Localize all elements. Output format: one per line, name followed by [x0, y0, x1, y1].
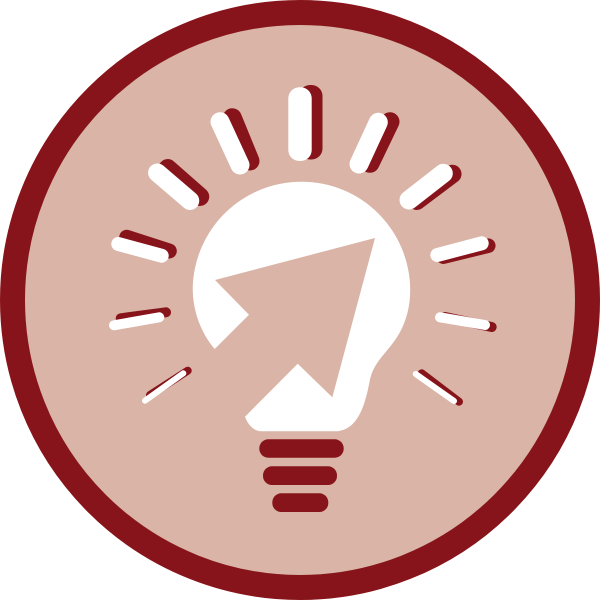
- ray shadows: dark red offsets: [121, 85, 492, 402]
- rays: light rays around the bulb: [114, 85, 492, 402]
- icon: bulb base bars: [259, 439, 344, 512]
- ray highlights: white bars: [114, 87, 485, 401]
- icon: white bulb with arrow cutout: [193, 182, 410, 431]
